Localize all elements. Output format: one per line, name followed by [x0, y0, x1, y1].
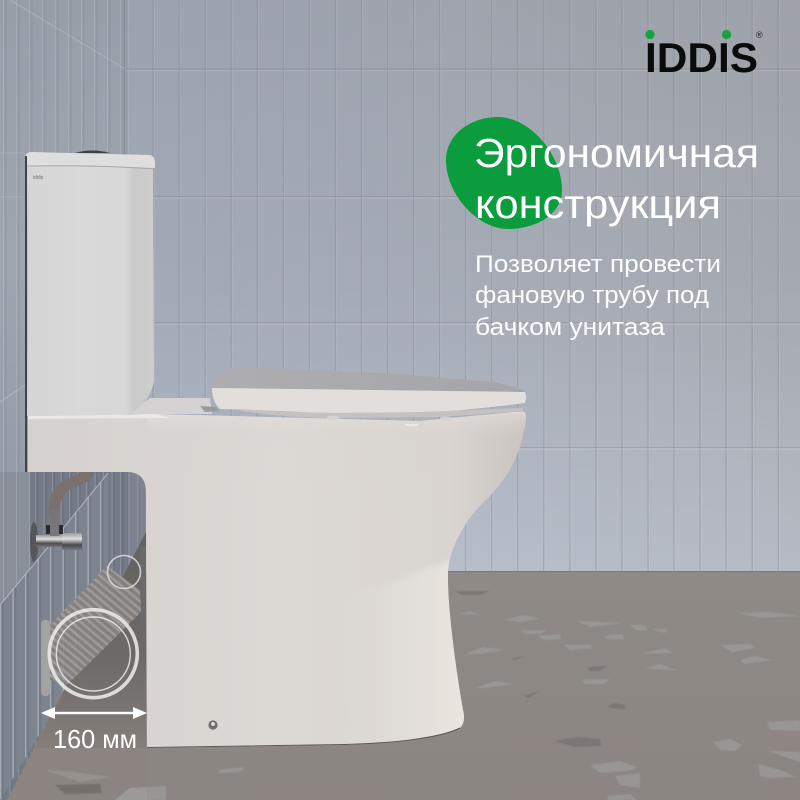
icon: angle valve [30, 510, 82, 562]
description text: Позволяет провести [475, 251, 721, 278]
heading: конструкция [475, 181, 721, 227]
description text: фановую трубу под [475, 282, 709, 309]
dimension arrow [41, 707, 147, 719]
deck behind tank [128, 398, 212, 414]
callout: small pipe ring [108, 556, 140, 588]
icon: water hose [54, 470, 90, 512]
back wall with tiles [120, 0, 800, 575]
floor [125, 571, 800, 800]
gap under tank: wall, valve and fan pipe [0, 470, 147, 800]
logo: IDDIS: ® [756, 30, 763, 40]
icon: fixing bolt [208, 720, 218, 730]
gap floor [7, 690, 147, 800]
heading: Эргономичная [474, 130, 759, 176]
dimension label: 160 мм [53, 724, 137, 754]
description text: бачком унитаза [475, 314, 666, 341]
side wall with narrow tiles [0, 0, 125, 480]
tank logo: iddis [33, 175, 44, 181]
fan pipe [41, 546, 147, 696]
logo: IDDIS: IDDIS [645, 34, 758, 81]
toilet bowl and base [28, 398, 532, 750]
callout: large pipe rings [49, 610, 137, 698]
green blob accent [446, 117, 562, 229]
cistern tank [25, 150, 155, 472]
toilet seat [200, 367, 526, 421]
floor stone chips [147, 611, 800, 800]
